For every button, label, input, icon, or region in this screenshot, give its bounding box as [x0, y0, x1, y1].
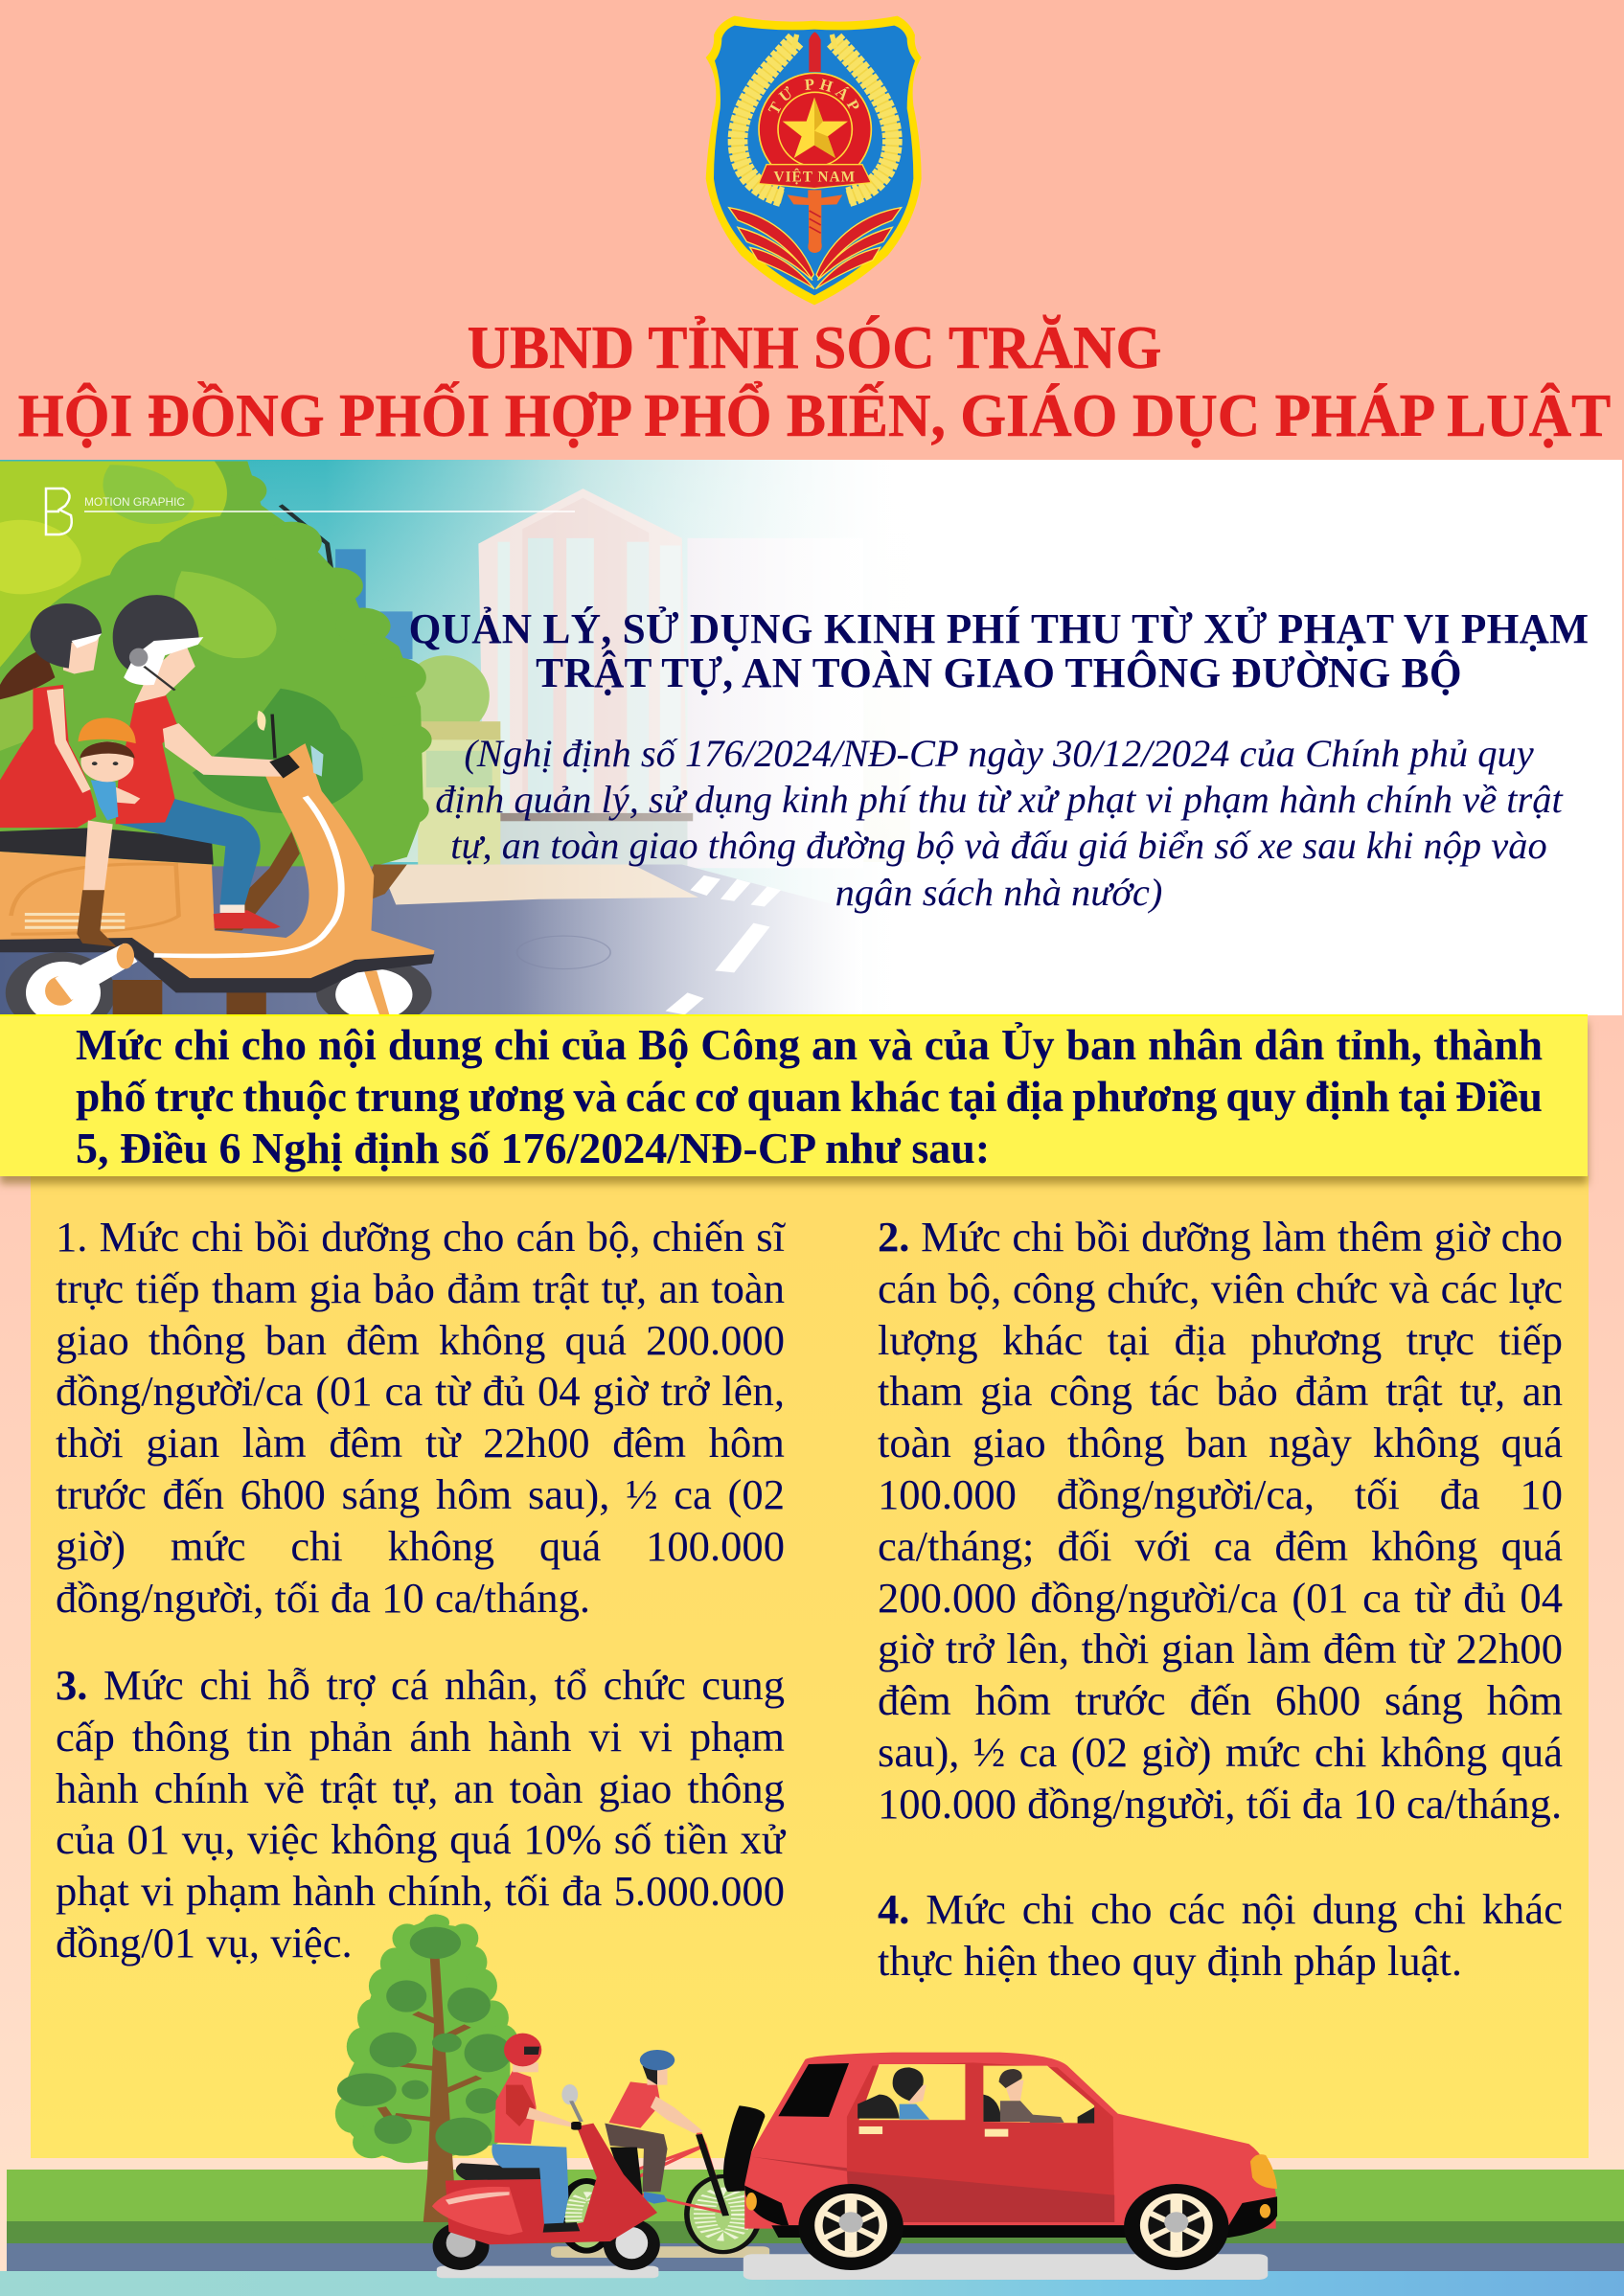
text block: item 2: 2. Mức chi bồi dưỡng làm thêm giờ cho: [878, 1213, 1563, 1261]
tree: [335, 1914, 518, 2222]
hero heading: [409, 605, 1589, 696]
text block: item 3: đồng/01 vụ, việc.: [56, 1919, 353, 1966]
hero subtitle: decree citation: [435, 732, 1564, 914]
text block: item 3: của 01 vụ, việc không quá 10% số tiền xử: [56, 1815, 785, 1863]
text block: item 1: đồng/người, tối đa 10 ca/tháng.: [56, 1574, 590, 1622]
low shop building: [418, 721, 500, 864]
hero subtitle: decree citation: (Nghị định số 176/2024/NĐ-CP ngày 30/12/2024 của Chính phủ quy: [464, 732, 1534, 775]
text block: item 2: 100.000 đồng/người, tối đa 10 ca/tháng.: [878, 1780, 1562, 1828]
scooter and rider: [432, 2034, 660, 2270]
child: [79, 717, 140, 821]
background small trees: [338, 655, 490, 853]
panel: hero banner: [0, 460, 1622, 1015]
text block: item 2: đêm hôm trước đến 6h00 sáng hôm: [878, 1676, 1563, 1724]
intro text: Mức chi cho nội dung chi của Bộ Công an và của Ủy ban nhân dân tỉnh, thành: [76, 1020, 1543, 1069]
text block: item 2: toàn giao thông ban ngày không quá: [878, 1419, 1563, 1466]
title: issuing body: HỘI ĐỒNG PHỐI HỢP PHỔ BIẾN, GIÁO DỤC PHÁP LUẬT: [18, 381, 1611, 449]
text block: item 1: trước đến 6h00 sáng hôm sau), ½ ca (02: [56, 1470, 785, 1518]
text block: item 4: 4. Mức chi cho các nội dung chi khác: [878, 1885, 1563, 1933]
text block: item 1: giao thông ban đêm không quá 200.000: [56, 1316, 785, 1364]
text block: item 2: sau), ½ ca (02 giờ) mức chi không quá: [878, 1728, 1563, 1776]
text block: item 3: 3. Mức chi hỗ trợ cá nhân, tổ chức cung: [56, 1661, 785, 1709]
text block: item 2: 200.000 đồng/người/ca (01 ca từ đủ 04: [878, 1574, 1563, 1622]
illustration: family on scooter in a city street: [0, 460, 880, 1014]
text block: item 1: [56, 1213, 786, 1622]
man driving: [113, 595, 300, 928]
illustration: road scene with tree, scooter, bicycle and car: [0, 1914, 1624, 2296]
title: issuing body: UBND TỈNH SÓC TRĂNG: [468, 313, 1161, 381]
hero heading: QUẢN LÝ, SỬ DỤNG KINH PHÍ THU TỪ XỬ PHẠT VI PHẠM: [409, 605, 1589, 652]
text block: item 2: [878, 1213, 1563, 1828]
intro text: [76, 1020, 1543, 1172]
hero heading: TRẬT TỰ, AN TOÀN GIAO THÔNG ĐƯỜNG BỘ: [536, 649, 1462, 696]
text block: item 1: thời gian làm đêm từ 22h00 đêm hôm: [56, 1419, 785, 1466]
panel: body content background: [31, 1175, 1589, 2158]
text block: item 1: 1. Mức chi bồi dưỡng cho cán bộ, chiến sĩ: [56, 1213, 785, 1261]
text block: item 2: 100.000 đồng/người/ca, tối đa 10: [878, 1470, 1563, 1518]
hero subtitle: decree citation: ngân sách nhà nước): [835, 871, 1162, 914]
emblem: shield of Tư pháp: [705, 15, 922, 305]
title: issuing body: [18, 313, 1611, 449]
logo: motion graphic watermark: MOTION GRAPHIC: [84, 495, 185, 509]
street lamp: [281, 505, 332, 569]
text block: item 3: hành chính về trật tự, an toàn giao thông: [56, 1764, 785, 1812]
background city buildings: [335, 489, 863, 868]
text block: item 1: trực tiếp tham gia bảo đảm trật tự, an toàn: [56, 1264, 785, 1312]
red car: [723, 2053, 1277, 2270]
text block: item 2: tham gia công tác bảo đảm trật tự, an: [878, 1367, 1563, 1415]
text block: item 3: cấp thông tin phản ánh hành vi vi phạm: [56, 1713, 785, 1761]
text block: item 1: đồng/người/ca (01 ca từ đủ 04 giờ trở lên,: [56, 1367, 785, 1415]
scooter: [0, 711, 434, 1033]
text block: item 3: [56, 1661, 786, 1966]
tree trunk: [215, 831, 300, 930]
text block: item 3: phạt vi phạm hành chính, tối đa 5.000.000: [56, 1867, 785, 1915]
ground strips: [0, 2170, 1624, 2296]
intro text: phố trực thuộc trung ương và các cơ quan khác tại địa phương quy định tại Điều: [76, 1072, 1543, 1121]
text block: item 1: giờ) mức chi không quá 100.000: [56, 1522, 785, 1570]
emblem: shield of Tư pháp: TƯ PHÁP: [768, 79, 858, 113]
text block: item 2: ca/tháng; đối với ca đêm không quá: [878, 1522, 1563, 1570]
text block: item 4: thực hiện theo quy định pháp luật.: [878, 1937, 1462, 1985]
text block: item 2: giờ trở lên, thời gian làm đêm từ 22h00: [878, 1625, 1563, 1672]
text block: item 2: lượng khác tại địa phương trực tiếp: [878, 1316, 1563, 1364]
panel: yellow intro band: [0, 1014, 1588, 1176]
fade to white: [498, 460, 910, 1015]
woman passenger: [0, 603, 117, 947]
emblem: shield of Tư pháp: VIỆT NAM: [774, 169, 856, 185]
hero subtitle: decree citation: tự, an toàn giao thông đường bộ và đấu giá biển số xe sau khi nộp vào: [450, 824, 1547, 867]
intro text: 5, Điều 6 Nghị định số 176/2024/NĐ-CP như sau:: [76, 1124, 990, 1172]
road shadows: [437, 2246, 1268, 2280]
text block: item 2: cán bộ, công chức, viên chức và các lực: [878, 1264, 1563, 1312]
tree canopy: [0, 461, 432, 866]
text block: item 4: [878, 1885, 1563, 1985]
logo: motion graphic watermark: [46, 489, 575, 534]
bicycle and cyclist: [557, 2050, 762, 2254]
hero subtitle: decree citation: định quản lý, sử dụng kinh phí thu từ xử phạt vi phạm hành chính về trật: [435, 778, 1563, 821]
pavement and road: [0, 864, 862, 1014]
